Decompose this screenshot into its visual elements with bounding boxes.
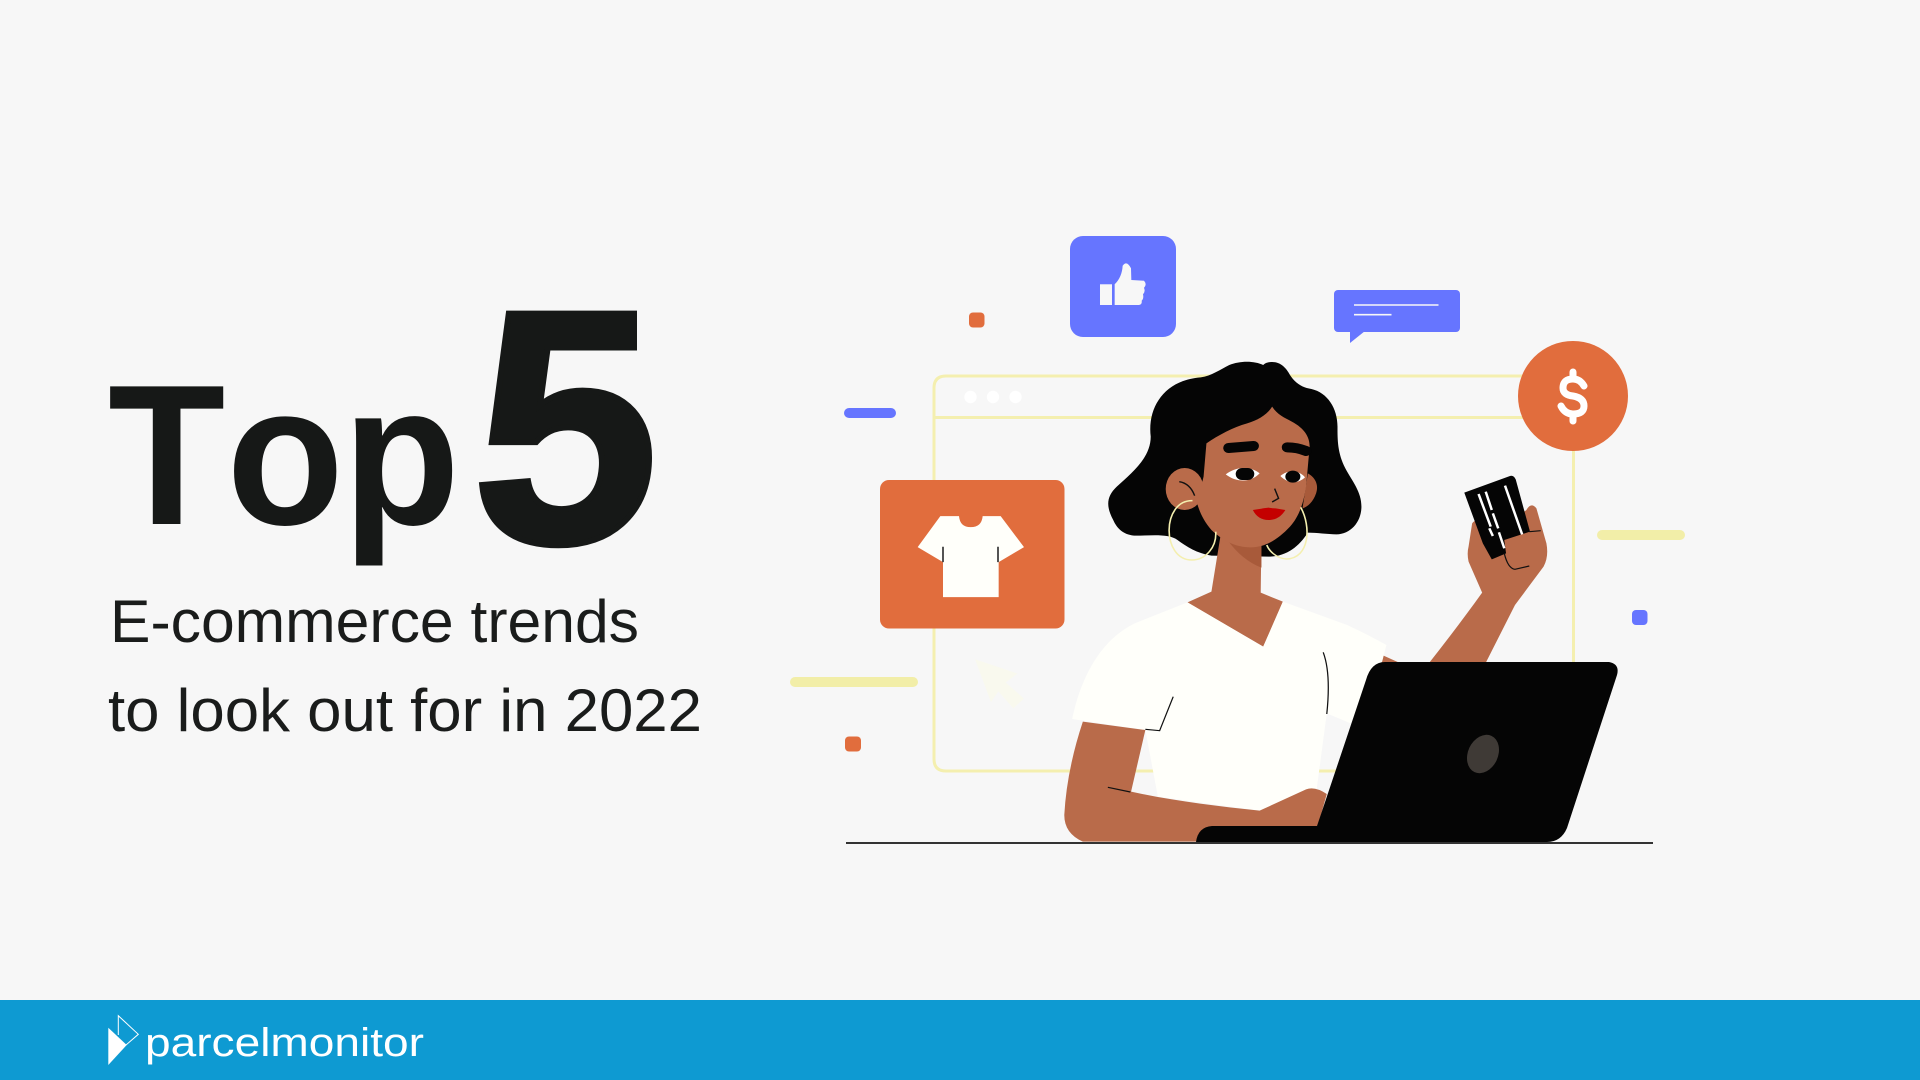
nose (1272, 489, 1279, 502)
icon: dollar coin (1518, 341, 1628, 451)
icon: like button (1070, 236, 1176, 337)
icon: thumbs up (1100, 263, 1146, 305)
icon: cursor arrow (975, 659, 1024, 708)
left ear (1166, 468, 1204, 510)
arm resting on laptop (1064, 722, 1327, 842)
logo wordmark: parcelmonitor (145, 1021, 424, 1065)
title word: Top: T (108, 343, 225, 567)
right ear (1302, 473, 1317, 508)
subtitle line 2: to look out for in 2022 (108, 677, 702, 744)
right eye (1280, 471, 1305, 483)
title word: Top: o (227, 343, 344, 567)
right hoop earring (1267, 507, 1307, 559)
clothing fold lines (1108, 652, 1328, 792)
skin at far shoulder (1379, 655, 1401, 663)
product card: t-shirt (880, 480, 1064, 628)
logo mark (108, 1016, 138, 1065)
credit card (1464, 476, 1541, 569)
title numeral: 5: 5 (463, 242, 674, 613)
title: Top 5 (108, 242, 674, 613)
title word: Top: p (343, 343, 460, 567)
subtitle line 1: E-commerce trends (110, 588, 639, 655)
icon: window dots (964, 391, 1022, 403)
illustration: woman (1064, 362, 1547, 842)
icon: t-shirt (918, 516, 1024, 597)
illustration: laptop (1196, 662, 1618, 842)
left eye (1226, 468, 1260, 480)
lips (1253, 508, 1285, 520)
desk line (846, 842, 1653, 844)
ear detail (1179, 482, 1195, 496)
subtitle (108, 588, 702, 744)
t-shirt (1072, 602, 1386, 811)
hair (1108, 362, 1361, 557)
neck shadow (1227, 540, 1261, 568)
face (1197, 407, 1310, 547)
icon: chat bubble (1334, 290, 1460, 343)
footer bar (0, 1000, 1920, 1080)
left hoop earring (1169, 501, 1216, 560)
raised arm and hand (1427, 505, 1547, 665)
neck (1187, 537, 1283, 647)
illustration: browser window outline (934, 376, 1574, 771)
laptop logo (1461, 730, 1505, 778)
decorative accent shapes (790, 312, 1685, 752)
eyebrows (1229, 446, 1306, 451)
